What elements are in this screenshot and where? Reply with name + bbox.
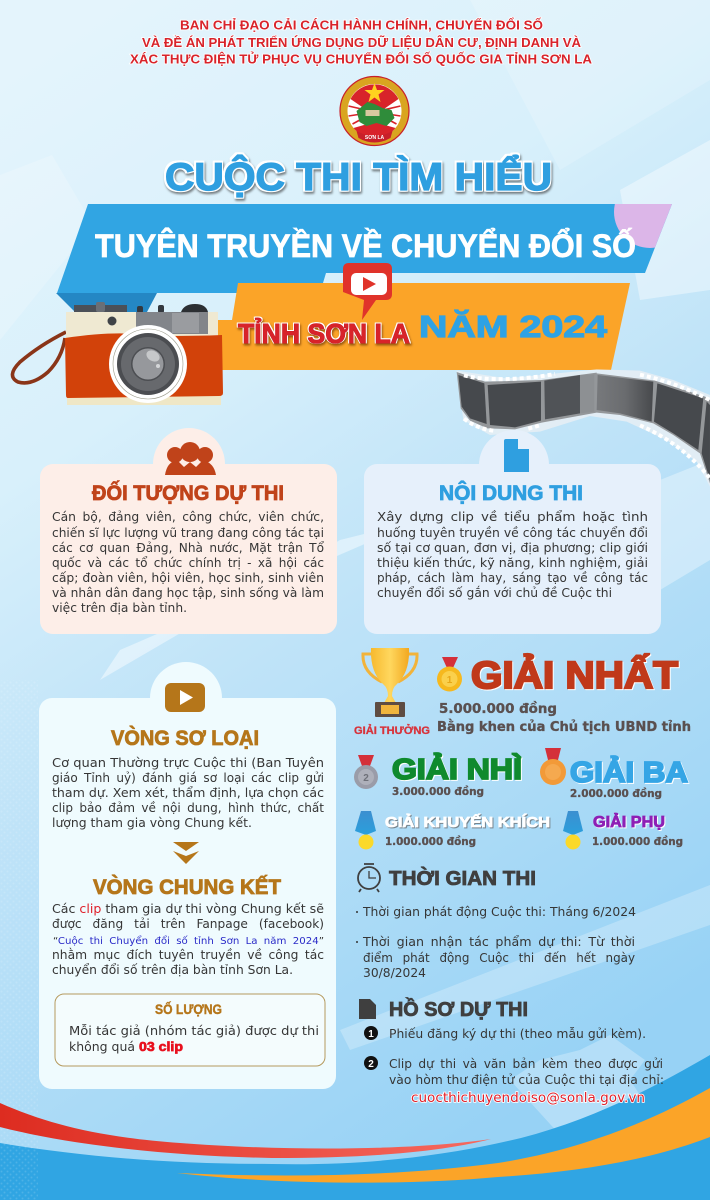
icon: document (504, 439, 529, 472)
text: preliminary round: giáo Tỉnh uỷ) đánh giá sơ loại các clip gửi (52, 771, 324, 785)
text: contest time details: điểm phát động Cuộc thi đến hết ngày (363, 951, 635, 965)
list item 2: Clip dự thi và văn bản kèm theo được gửi (389, 1057, 663, 1071)
prize: second: GIẢI NHÌ (392, 752, 522, 786)
text: contest content: huống tuyên truyền về công tác chuyển đổi (377, 526, 648, 540)
icon: gold medal (437, 657, 462, 692)
icon: provincial emblem: SƠN LA (365, 135, 385, 141)
text: contest time details: Thời gian nhận tác phẩm dự thi: Từ thời (362, 935, 635, 949)
icon: silver medal: 2 (363, 773, 369, 784)
text: final round: được đăng tải trên Fanpage (facebook) (52, 917, 324, 931)
prize: second (354, 752, 522, 798)
prize: side prize: 1.000.000 đồng (592, 835, 683, 848)
prize: encouragement (355, 811, 550, 850)
callout: quantity: SỐ LƯỢNG (155, 1002, 222, 1017)
text: final round: “Cuộc thi Chuyển đổi số tỉnh Sơn La năm 2024 ” (53, 934, 324, 947)
text: contest content: số tại cơ quan, đơn vị, địa phương; clip giới (377, 541, 648, 555)
icon: blue ribbon medal (563, 811, 583, 850)
header organisation text: VÀ ĐỀ ÁN PHÁT TRIỂN ỨNG DỤNG DỮ LIỆU DÂN CƯ, ĐỊNH DANH VÀ (142, 35, 581, 50)
text: contest time details (356, 905, 636, 980)
text: final round: chuyển đổi số trên địa bàn tỉnh Sơn La. (52, 963, 293, 977)
icon: provincial emblem (340, 76, 409, 146)
heading: province: TỈNH SƠN LA (238, 317, 410, 349)
prize: third: 2.000.000 đồng (570, 787, 662, 800)
text: target participants: việc trên địa bàn tỉnh. (52, 601, 187, 615)
heading: preliminary round: VÒNG SƠ LOẠI (111, 726, 259, 750)
label: prizes: GIẢI THƯỞNG (354, 724, 430, 737)
arrow: down chevrons (173, 842, 199, 864)
heading: target participants: ĐỐI TƯỢNG DỰ THI (92, 481, 284, 505)
icon: play button (165, 683, 205, 712)
icon: silver medal (354, 755, 378, 789)
text: preliminary round: tham dự. Xem xét, thẩm định, lựa chọn các (52, 786, 324, 800)
prize: first (437, 653, 691, 735)
prize: first: 5.000.000 đồng (439, 702, 557, 717)
heading: contest time: THỜI GIAN THI (389, 866, 536, 890)
text: preliminary round (52, 756, 324, 830)
icon: bronze medal (540, 748, 566, 785)
header organisation text: XÁC THỰC ĐIỆN TỬ PHỤC VỤ CHUYỂN ĐỔI SỐ QUỐC GIA TỈNH SƠN LA (130, 52, 592, 66)
text: final round: nhằm mục đích tuyên truyền về công tác (52, 948, 324, 962)
icon: people group (165, 442, 216, 475)
text: target participants: cấp; đoàn viên, hội viên, học sinh, sinh viên (52, 571, 324, 585)
text: target participants: và nhân dân đang học tập, sinh sống và làm (52, 586, 324, 600)
text: contest content (377, 510, 648, 600)
illustration: film strip (457, 369, 710, 487)
text: contest content: pháp, cách làm hay, sáng tạo về công tác (377, 571, 648, 585)
prize: encouragement: 1.000.000 đồng (385, 835, 476, 848)
panel: target participants (40, 428, 337, 634)
heading: year: NĂM 2024 (419, 309, 608, 344)
header organisation text (130, 18, 592, 66)
text: final round: Các clip tham gia dự thi vòng Chung kết sẽ (52, 902, 324, 916)
prize: second: 3.000.000 đồng (392, 785, 484, 798)
icon: gold medal: 1 (447, 675, 453, 686)
heading: contest content: NỘI DUNG THI (439, 481, 583, 505)
callout: quantity: không quá (69, 1040, 135, 1054)
illustration: camera (12, 302, 223, 405)
heading: final round: VÒNG CHUNG KẾT (93, 875, 281, 899)
text: preliminary round: Cơ quan Thường trực Cuộc thi (Ban Tuyên (52, 756, 324, 770)
text: preliminary round: lượng tham gia vòng Chung kết. (52, 816, 252, 830)
prize: third: GIẢI BA (570, 755, 688, 789)
callout: quantity: Mỗi tác giả (nhóm tác giả) được dự thi (69, 1024, 319, 1038)
text: target participants: chiến sĩ lực lượng vũ trang đang công tác tại (52, 526, 324, 540)
header organisation text: BAN CHỈ ĐẠO CẢI CÁCH HÀNH CHÍNH, CHUYỂN ĐỔI SỐ (180, 18, 543, 32)
icon: trophy (363, 648, 417, 717)
list item 1: Phiếu đăng ký dự thi (theo mẫu gửi kèm). (389, 1027, 646, 1041)
text: target participants: quốc và các tổ chức chính trị - xã hội các (52, 556, 324, 570)
prize: third (540, 748, 688, 800)
text: final round (52, 902, 324, 977)
list item 1: 1 (368, 1029, 374, 1040)
list item 2 (364, 1056, 664, 1106)
text: contest content: thiệu kiến thức, kỹ năng, kinh nghiệm, giải (377, 556, 648, 570)
icon: document (359, 999, 376, 1019)
section: application file (359, 997, 664, 1106)
prize: side prize: GIẢI PHỤ (593, 812, 665, 831)
heading: application file: HỒ SƠ DỰ THI (389, 997, 528, 1021)
panel: contest content (364, 430, 661, 634)
text: target participants: Cán bộ, đảng viên, công chức, viên chức, (52, 510, 324, 524)
list item 2: 2 (368, 1059, 374, 1070)
list item 2: vào hòm thư điện tử của Cuộc thi tại địa chỉ: (389, 1073, 664, 1087)
banner: orange ribbon (205, 283, 630, 370)
prize: encouragement: GIẢI KHUYẾN KHÍCH (385, 814, 550, 831)
text: target participants: các cơ quan Đảng, Nhà nước, Mặt trận Tổ (52, 541, 325, 555)
list item 2: cuocthichuyendoiso@sonla.gov.vn (411, 1091, 645, 1106)
heading: banner title: TUYÊN TRUYỀN VỀ CHUYỂN ĐỔI SỐ (95, 228, 636, 264)
banner: blue ribbon (56, 204, 672, 312)
prize: first: GIẢI NHẤT (471, 653, 678, 697)
section: contest time (356, 864, 636, 980)
callout: quantity (55, 994, 325, 1066)
icon: video speech bubble (343, 263, 392, 320)
bottom waves (0, 1055, 710, 1200)
panel: contest rounds (39, 662, 336, 1089)
callout: quantity: 03 clip (139, 1039, 183, 1054)
text: preliminary round: clip bảo đảm về nội dung, hình thức, chất (52, 801, 324, 815)
text: contest time details: 30/8/2024 (363, 966, 426, 980)
text: contest content: Xây dựng clip về tiểu phẩm hoặc tình (377, 510, 648, 524)
prize: first: Bằng khen của Chủ tịch UBND tỉnh (437, 720, 691, 735)
title: contest heading: CUỘC THI TÌM HIỂU (165, 154, 552, 199)
prize: side prize (563, 811, 683, 850)
text: target participants (52, 510, 325, 615)
text: contest content: chuyển đổi số gắn với chủ đề Cuộc thi (377, 586, 612, 600)
text: contest time details: Thời gian phát động Cuộc thi: Tháng 6/2024 (362, 905, 636, 919)
icon: alarm clock (358, 864, 380, 892)
icon: blue ribbon medal (355, 811, 376, 850)
